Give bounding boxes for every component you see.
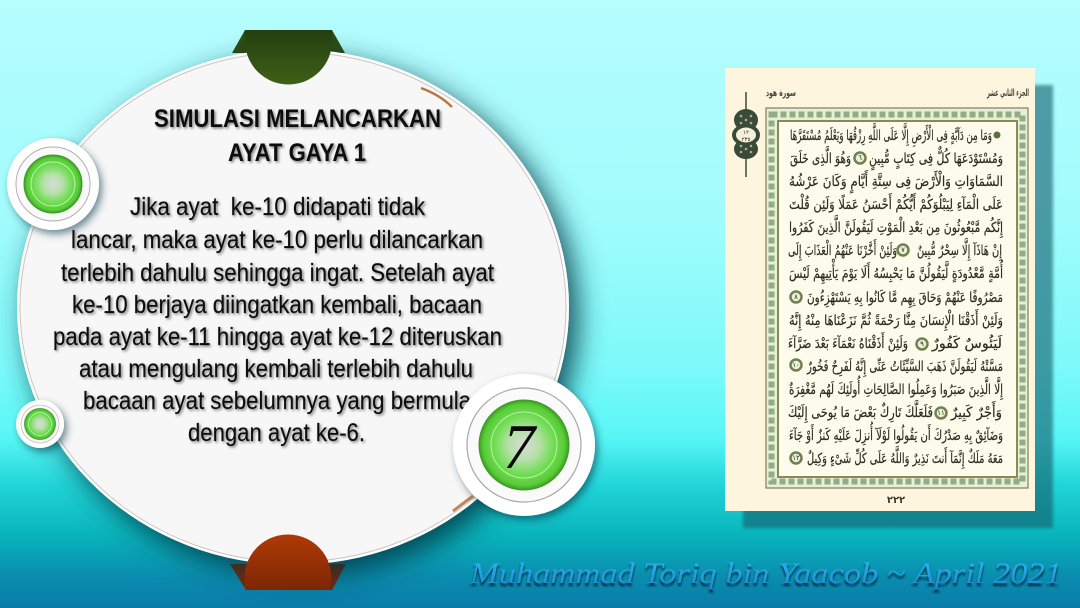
- bottom tab: dome over circle: [244, 534, 332, 590]
- panel: quran page: [725, 68, 1035, 511]
- arabic text block: عَلَى الْمَآءِ لِيَبْلُوَكُمْ أَيُّكُمْ أَحْسَنُ عَمَلًا وَلَئِن قُلْتَ: [789, 193, 1003, 213]
- arabic text block: مَصْرُوفًا عَنْهُمْ وَحَاقَ بِهِم مَّا كَانُوا بِهِ يَسْتَهْزِءُونَ: [807, 289, 1003, 308]
- page header: surah: سورة هود: [766, 88, 796, 99]
- bottom tab: wings: [230, 564, 346, 590]
- signature: Muhammad Toriq bin Yaacob ~ April 2021: [469, 557, 1062, 590]
- body text: Jika ayat ke-10 didapati tidak: [130, 193, 425, 221]
- arabic text block: [788, 123, 1003, 469]
- arabic text block: وَأَجْرٌ كَبِيرٌ: [950, 401, 1002, 421]
- heading: [154, 105, 441, 167]
- body text: [53, 193, 502, 447]
- arabic text block: ١٠: [792, 361, 800, 369]
- body text: ke-10 berjaya diingatkan kembali, bacaan: [72, 291, 482, 319]
- heading: SIMULASI MELANCARKAN: [154, 105, 441, 133]
- body text: terlebih dahulu sehingga ingat. Setelah ayat: [61, 259, 494, 287]
- arabic text block: وَلَئِنْ أَخَّرْنَا عَنْهُمُ الْعَذَابَ إِلَى: [788, 239, 897, 261]
- arabic text block: لَيَئُوسٌ كَفُورٌ: [931, 335, 1003, 352]
- icon: small green badge left: [16, 400, 64, 448]
- arabic text block: وَضَآئِقٌ بِهِ صَدْرُكَ أَن يَقُولُوا لَوْلَآ أُنزِلَ عَلَيْهِ كَنزٌ أَوْ جَآءَ: [789, 422, 1003, 445]
- arabic text block: ٩: [920, 340, 924, 348]
- icon: side ornament: ٢٣٥: [742, 137, 750, 143]
- arabic text block: أُمَّةٍ مَّعْدُودَةٍ لَّيَقُولُنَّ مَا يَحْبِسُهُ أَلَا يَوْمَ يَأْتِيهِمْ لَيْسَ: [789, 259, 1003, 284]
- heading: AYAT GAYA 1: [228, 139, 366, 167]
- arabic text block: إِلَّا الَّذِينَ صَبَرُوا وَعَمِلُوا الصَّالِحَاتِ أُولَئِكَ لَهُم مَّغْفِرَةٌ: [789, 376, 1003, 400]
- top tab: bowl over circle: [245, 30, 332, 84]
- arabic text block: مَعَهُ مَلَكٌ إِنَّمَآ أَنتَ نَذِيرٌ وَاللَّهُ عَلَى كُلِّ شَىْءٍ وَكِيلٌ: [807, 446, 1003, 469]
- top tab: wings: [232, 30, 345, 53]
- arabic text block: ١٢: [792, 454, 800, 462]
- icon: side ornament: [732, 92, 760, 177]
- arabic text block: ١١: [937, 409, 945, 417]
- arabic text block: ٧: [901, 246, 905, 254]
- page shadow: [743, 85, 1053, 528]
- body text: pada ayat ke-11 hingga ayat ke-12 diteruskan: [53, 323, 502, 351]
- arabic text block: ٦: [858, 154, 862, 162]
- arabic text block: إِنْ هَاذَآ إِلَّا سِحْرٌ مُّبِينٌ: [917, 238, 1002, 261]
- arabic text block: السَّمَاوَاتِ وَالْأَرْضَ فِى سِتَّةِ أَيَّامٍ وَكَانَ عَرْشُهُ: [789, 170, 1003, 194]
- panel: quran page: الجزء الثاني عشر: [987, 88, 1029, 99]
- number badge 7: 7: [503, 411, 538, 482]
- arabic text block: ٨: [794, 293, 798, 301]
- icon: side ornament: ١٢: [743, 130, 749, 136]
- arabic text block: وَمُسْتَوْدَعَهَا كُلٌّ فِى كِتَابٍ مُّبِينٍ: [869, 146, 1003, 171]
- arabic text block: إِنَّكُم مَّبْعُوثُونَ مِن بَعْدِ الْمَوْتِ لَيَقُولَنَّ الَّذِينَ كَفَرُوا: [789, 215, 1003, 238]
- arabic text block: فَلَعَلَّكَ تَارِكٌ بَعْضَ مَا يُوحَى إِلَيْكَ: [788, 400, 933, 423]
- orange accent: bottom right: [453, 496, 473, 511]
- body text: bacaan ayat sebelumnya yang bermula: [83, 387, 471, 415]
- icon: green badge top left: [7, 138, 99, 230]
- orange accent: top right: [421, 88, 452, 107]
- arabic text block: وَلَئِنْ أَذَقْنَاهُ نَعْمَآءَ بَعْدَ ضَرَّآءَ: [788, 332, 908, 352]
- body text: dengan ayat ke-6.: [188, 419, 365, 447]
- body text: lancar, maka ayat ke-10 perlu dilancarkan: [71, 226, 483, 254]
- body text: atau mengulang kembali terlebih dahulu: [79, 355, 473, 383]
- page number: ٢٢٢: [887, 495, 905, 506]
- arabic text block: وَهُوَ الَّذِى خَلَقَ: [790, 146, 851, 167]
- panel: main circle: [17, 49, 569, 565]
- number badge 7: [453, 374, 595, 516]
- page frame: [766, 108, 1028, 488]
- arabic text block: مَسَّتْهُ لَيَقُولَنَّ ذَهَبَ السَّيِّئَاتُ عَنِّى إِنَّهُ لَفَرِحٌ فَخُورٌ: [806, 358, 1003, 377]
- arabic text block: وَلَئِنْ أَذَقْنَا الْإِنسَانَ مِنَّا رَحْمَةً ثُمَّ نَزَعْنَاهَا مِنْهُ إِنَّهُ: [789, 309, 1003, 331]
